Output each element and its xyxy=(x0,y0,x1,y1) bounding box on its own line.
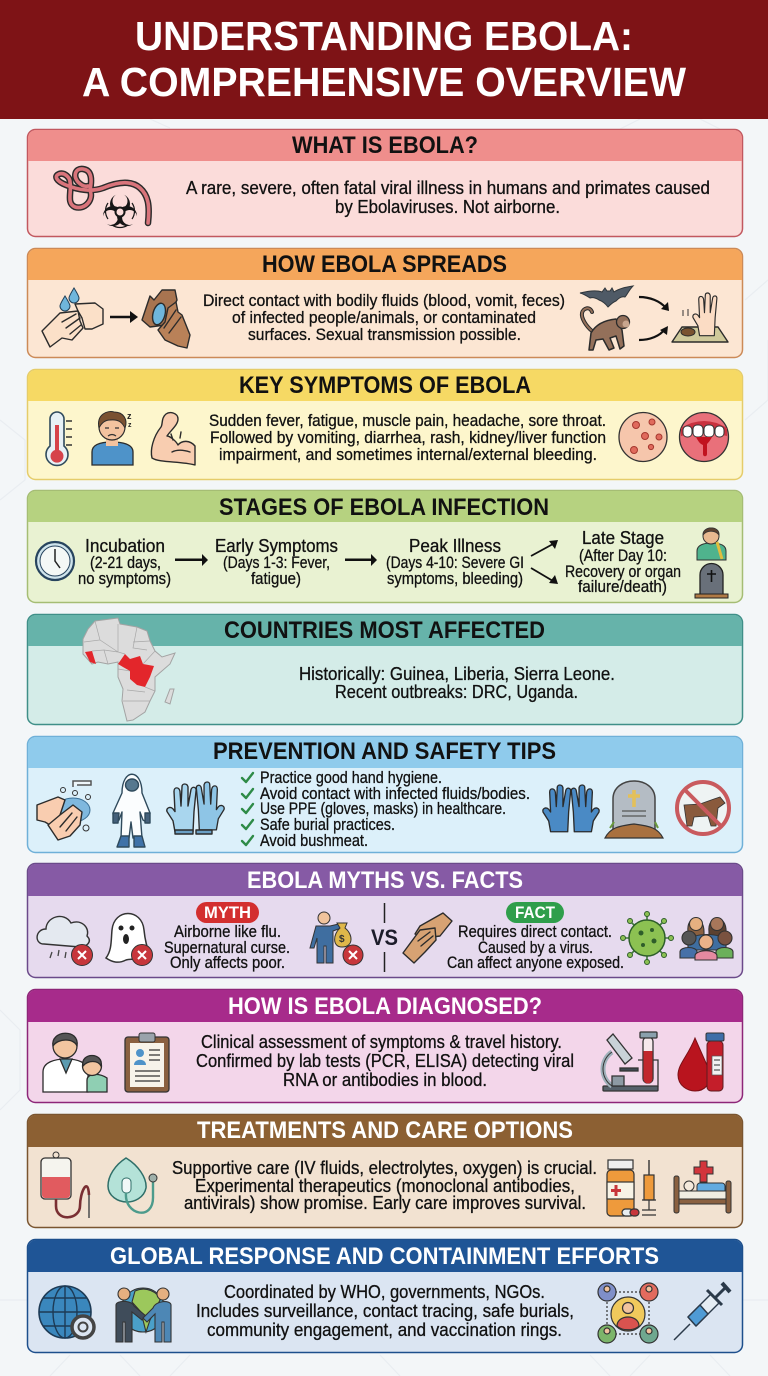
icon: people shaking hands around globe xyxy=(116,1288,171,1342)
icon: tombstone xyxy=(695,564,728,598)
text: myths: Supernatural curse. xyxy=(164,938,290,957)
icon: contact tracing network xyxy=(598,1283,658,1343)
icon: diverse group of people xyxy=(680,918,733,960)
icon: clock xyxy=(36,542,74,580)
stage: late stage xyxy=(565,528,681,596)
text: global response: Includes surveillance, contact tracing, safe burials, xyxy=(196,1301,574,1321)
icon: fatigued person xyxy=(92,411,133,465)
title: UNDERSTANDING EBOLA: xyxy=(135,13,633,59)
text: facts: Requires direct contact. xyxy=(458,922,612,941)
title xyxy=(82,13,686,105)
panel: stages of infection xyxy=(28,490,742,602)
icon: virus xyxy=(620,912,674,964)
icon: ebola virus filament xyxy=(56,169,149,223)
text: countries most affected: Historically: Guinea, Liberia, Sierra Leone. xyxy=(299,664,615,684)
panel: prevention and safety xyxy=(28,736,742,852)
text: diagnosis: Clinical assessment of symptoms & travel history. xyxy=(201,1032,562,1052)
icon: hands touching xyxy=(403,913,452,963)
badge: fact: FACT xyxy=(515,903,556,922)
text: key symptoms: Sudden fever, fatigue, muscle pain, headache, sore throat. xyxy=(209,411,606,430)
badge: myth: MYTH xyxy=(204,903,251,922)
icon: light blue gloves xyxy=(167,782,224,834)
panel: countries most affected xyxy=(28,614,742,724)
stage: incubation: (2-21 days, xyxy=(90,553,161,572)
icon: blood drop with vial xyxy=(678,1033,724,1091)
stage: incubation xyxy=(78,536,171,588)
stage: peak illness: symptoms, bleeding) xyxy=(387,569,523,588)
list: prevention tips: Practice good hand hygiene. xyxy=(260,768,442,787)
panel: diagnosis xyxy=(28,990,742,1102)
panel: how ebola spreads xyxy=(28,248,742,358)
icon: cloud with rain, crossed xyxy=(37,916,92,966)
text: diagnosis: RNA or antibodies in blood. xyxy=(283,1070,487,1090)
text: global response xyxy=(196,1282,574,1340)
arrow: early to peak xyxy=(345,554,377,566)
text: treatments xyxy=(172,1158,597,1213)
heading: countries most affected: COUNTRIES MOST AFFECTED xyxy=(224,617,545,644)
icon: hands touching fluids xyxy=(42,303,103,347)
divider: versus: VS xyxy=(371,925,398,950)
icon: doctor and patient xyxy=(43,1033,107,1092)
icon: hand washing xyxy=(37,781,91,840)
text: diagnosis: Confirmed by lab tests (PCR, ELISA) detecting viral xyxy=(196,1051,574,1071)
text: key symptoms xyxy=(209,411,606,464)
text: diagnosis xyxy=(196,1032,574,1090)
icon: grave xyxy=(605,781,663,838)
heading: what is ebola: WHAT IS EBOLA? xyxy=(292,132,478,159)
heading: global response: GLOBAL RESPONSE AND CONTAINMENT EFFORTS xyxy=(110,1243,659,1270)
text: what is ebola xyxy=(186,178,710,217)
check marks xyxy=(242,773,253,845)
stage: early symptoms xyxy=(215,536,338,588)
stage: early symptoms: Early Symptoms xyxy=(215,536,338,556)
icon: water droplets xyxy=(60,288,79,311)
text: myths xyxy=(164,922,290,972)
text: myths: Only affects poor. xyxy=(170,953,285,972)
title banner xyxy=(0,0,768,119)
stage: incubation: no symptoms) xyxy=(78,569,171,588)
icon: bat xyxy=(580,286,633,307)
icon: no bushmeat xyxy=(677,782,729,834)
icon: oxygen mask xyxy=(108,1158,157,1213)
panel: treatments xyxy=(28,1114,742,1228)
text: facts: Can affect anyone exposed. xyxy=(447,953,624,972)
stage: peak illness: (Days 4-10: Severe GI xyxy=(386,553,524,572)
heading: myths vs facts: EBOLA MYTHS VS. FACTS xyxy=(247,867,523,894)
icon: dark blue gloves xyxy=(543,785,599,832)
text: facts xyxy=(447,922,624,972)
text: what is ebola: A rare, severe, often fatal viral illness in humans and primates caused xyxy=(186,178,710,198)
icon: iv bag xyxy=(41,1152,89,1218)
list: prevention tips: Avoid bushmeat. xyxy=(260,831,368,850)
stage: peak illness: Peak Illness xyxy=(409,536,501,556)
icon: hands with contaminated fluid xyxy=(142,290,190,348)
panel: what is ebola xyxy=(28,130,742,236)
badge: fact xyxy=(506,902,564,923)
icon: syringe xyxy=(674,1283,730,1340)
arrow: monkey to surface xyxy=(639,326,668,340)
arrow: peak to recovery xyxy=(531,540,558,556)
stage: early symptoms: fatigue) xyxy=(251,569,301,588)
heading: prevention and safety: PREVENTION AND SAFETY TIPS xyxy=(213,738,556,765)
stage: late stage: failure/death) xyxy=(578,577,667,596)
text: countries most affected: Recent outbreaks: DRC, Uganda. xyxy=(335,682,578,702)
icon: hospital bed xyxy=(674,1161,731,1213)
icon: medical clipboard xyxy=(125,1033,169,1092)
map: africa with affected countries highlighted xyxy=(83,618,175,721)
heading: stages of infection: STAGES OF EBOLA INFECTION xyxy=(219,494,549,521)
icon: microscope and test tube xyxy=(603,1032,658,1091)
icon: muscle arm xyxy=(151,413,195,465)
icon: ghost, crossed xyxy=(106,914,152,966)
icon: fatigued person: z xyxy=(128,422,132,429)
list: prevention tips: Safe burial practices. xyxy=(260,815,395,834)
text: how ebola spreads: Direct contact with bodily fluids (blood, vomit, feces) xyxy=(203,291,565,310)
icon: man with money bag: $ xyxy=(339,934,345,945)
text: treatments: antivirals) show promise. Early care improves survival. xyxy=(184,1193,586,1213)
text: how ebola spreads xyxy=(203,291,565,344)
panel: key symptoms xyxy=(28,370,742,480)
heading: diagnosis: HOW IS EBOLA DIAGNOSED? xyxy=(228,993,542,1020)
stage: late stage: Late Stage xyxy=(582,528,664,548)
icon: skin rash xyxy=(619,412,667,462)
icon: man with money bag xyxy=(310,912,363,965)
text: key symptoms: impairment, and sometimes internal/external bleeding. xyxy=(219,445,597,464)
icon: bleeding mouth xyxy=(680,412,728,462)
stage: early symptoms: (Days 1-3: Fever, xyxy=(223,553,330,572)
icon: recovered patient xyxy=(697,528,726,560)
text: treatments: Experimental therapeutics (monoclonal antibodies, xyxy=(195,1176,575,1196)
icon: protective suit xyxy=(113,774,150,847)
stage: late stage: Recovery or organ xyxy=(565,562,681,581)
icon: medicine bottle and syringe xyxy=(607,1160,656,1216)
icon: biohazard symbol xyxy=(103,194,137,228)
divider: versus xyxy=(371,903,398,972)
icon: hand touching contaminated surface xyxy=(672,293,728,342)
arrow: incubation to early xyxy=(175,554,208,566)
text: countries most affected xyxy=(299,664,615,702)
title: A COMPREHENSIVE OVERVIEW xyxy=(82,59,686,105)
icon: fatigued person: z xyxy=(127,411,132,421)
panel: myths vs facts xyxy=(28,864,742,978)
text: myths: Airborne like flu. xyxy=(174,922,281,941)
icon: globe with gear xyxy=(39,1286,94,1338)
text: how ebola spreads: surfaces. Sexual transmission possible. xyxy=(248,325,521,344)
text: treatments: Supportive care (IV fluids, electrolytes, oxygen) is crucial. xyxy=(172,1158,597,1178)
icon: monkey xyxy=(582,308,630,350)
text: how ebola spreads: of infected people/animals, or contaminated xyxy=(232,308,536,327)
stage: late stage: (After Day 10: xyxy=(579,546,667,565)
text: what is ebola: by Ebolaviruses. Not airborne. xyxy=(335,197,560,217)
text: key symptoms: Followed by vomiting, diarrhea, rash, kidney/liver function xyxy=(210,428,606,447)
stage: incubation: Incubation xyxy=(85,536,165,556)
panel: global response xyxy=(28,1240,742,1352)
arrow: contact to infection xyxy=(110,311,138,323)
heading: treatments: TREATMENTS AND CARE OPTIONS xyxy=(197,1117,573,1144)
text: global response: community engagement, and vaccination rings. xyxy=(207,1320,562,1340)
list: prevention tips xyxy=(242,768,530,850)
heading: key symptoms: KEY SYMPTOMS OF EBOLA xyxy=(239,372,531,399)
list: prevention tips: Use PPE (gloves, masks) in healthcare. xyxy=(260,799,506,818)
arrow: bat to surface xyxy=(639,297,669,311)
heading: how ebola spreads: HOW EBOLA SPREADS xyxy=(262,251,507,278)
list: prevention tips: Avoid contact with infected fluids/bodies. xyxy=(260,784,530,803)
badge: myth xyxy=(196,902,259,923)
text: global response: Coordinated by WHO, governments, NGOs. xyxy=(224,1282,545,1302)
text: facts: Caused by a virus. xyxy=(478,938,593,957)
stage: peak illness xyxy=(386,536,524,588)
arrow: peak to death xyxy=(531,568,558,584)
icon: thermometer xyxy=(46,412,72,465)
